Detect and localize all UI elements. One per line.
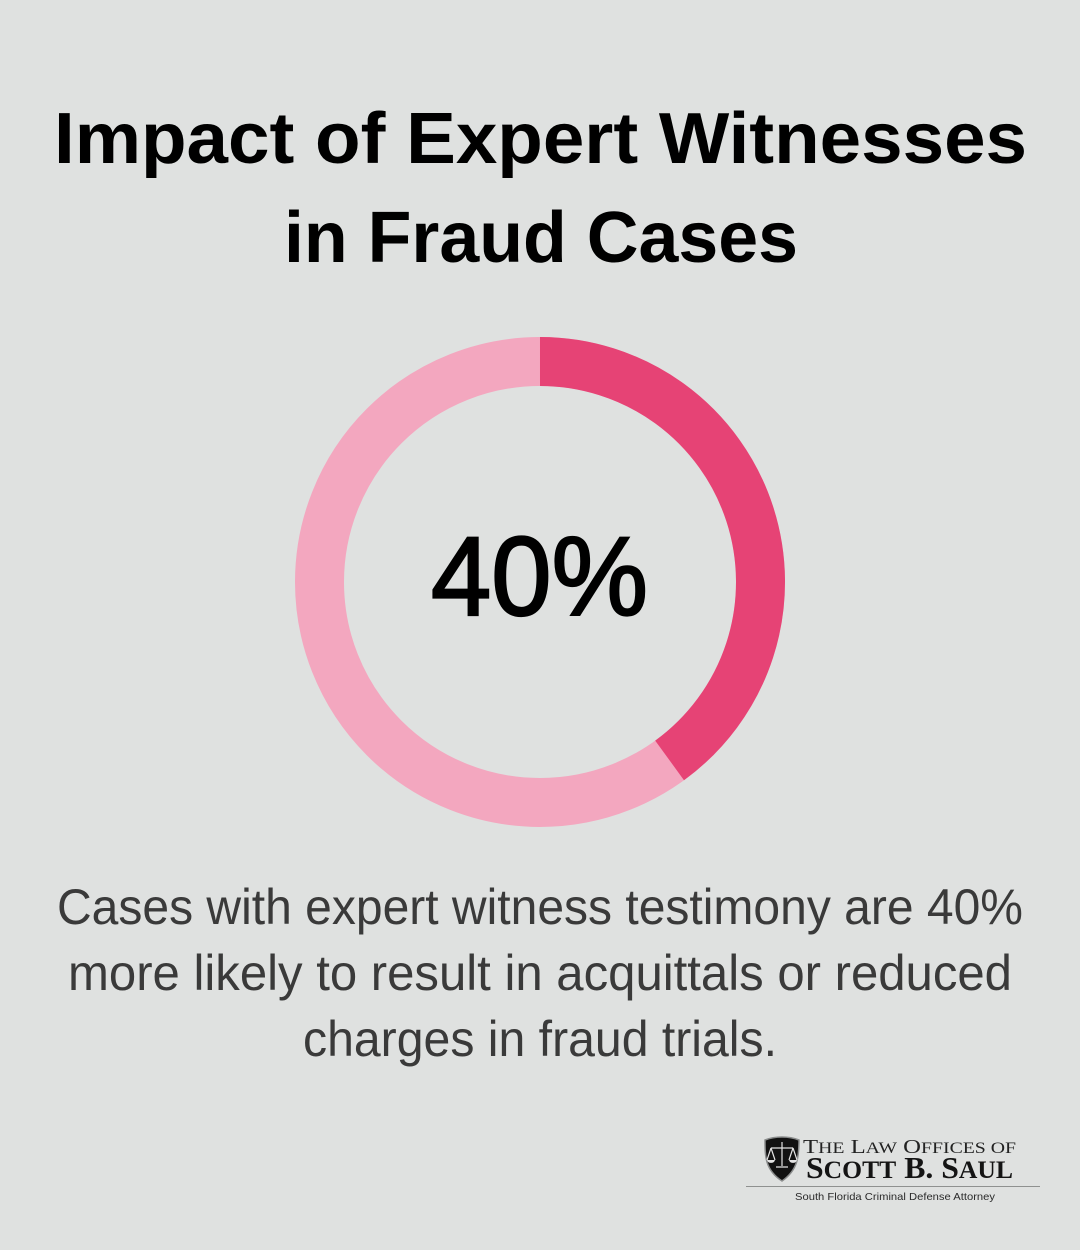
title: Impact of Expert Witnesses <box>54 99 1027 179</box>
donut track: remaining 60% <box>320 362 760 802</box>
logo line: The Law Offices of: THE L AW O FFICES OF <box>803 1136 1016 1158</box>
donut chart: 40% <box>320 362 761 802</box>
donut centre value: 40% <box>431 514 648 639</box>
title <box>54 99 1027 278</box>
donut segment: 40% <box>540 362 761 760</box>
logo tagline: South Florida Criminal Defense Attorney <box>795 1191 996 1203</box>
logo line: Scott B. Saul: SCOTT B. SAUL <box>806 1150 1013 1185</box>
description text: charges in fraud trials. <box>303 1011 777 1067</box>
logo: The Law Offices of Scott B. Saul <box>746 1136 1040 1203</box>
logo divider <box>746 1186 1040 1187</box>
description text <box>57 879 1023 1067</box>
description text: more likely to result in acquittals or reduced <box>68 945 1012 1001</box>
icon: shield with scales of justice <box>765 1137 799 1181</box>
description text: Cases with expert witness testimony are 40% <box>57 879 1023 935</box>
title: in Fraud Cases <box>284 198 798 278</box>
